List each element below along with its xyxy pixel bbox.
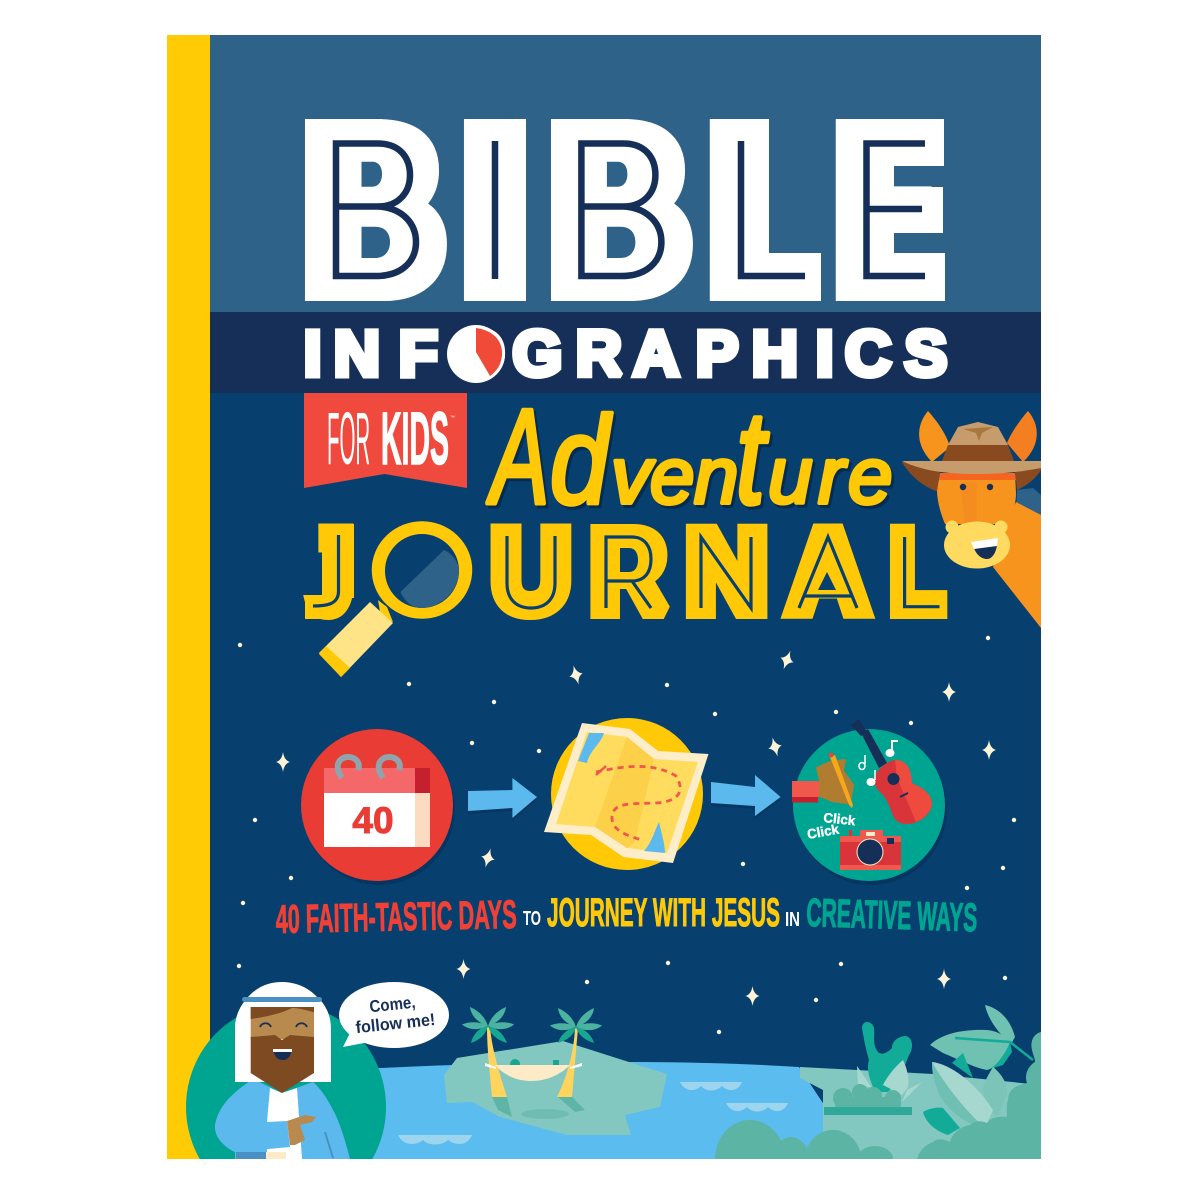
illustration: waves bbox=[398, 1082, 788, 1144]
illustration: right shore with plants bbox=[800, 1005, 1041, 1159]
title: BIBLE bbox=[304, 119, 945, 301]
icon: treasure map circle bbox=[544, 718, 708, 870]
title: BIBLE: I bbox=[456, 77, 533, 342]
heading: JOURNAL: O bbox=[385, 516, 455, 627]
tagline: TO bbox=[523, 908, 541, 930]
background: blue title band bbox=[210, 35, 1041, 312]
heading: Adventure script: e bbox=[652, 434, 697, 523]
tagline: JOURNEY WITH JESUS bbox=[547, 891, 780, 935]
title: BIBLE: B bbox=[548, 80, 692, 339]
title: BIBLE: L bbox=[705, 78, 814, 342]
heading: JOURNAL: A bbox=[789, 507, 867, 636]
illustration: sea bbox=[372, 1062, 823, 1159]
heading: JOURNAL: J bbox=[307, 508, 353, 636]
heading: Adventure script: d bbox=[550, 391, 613, 530]
hand bbox=[287, 1115, 316, 1145]
illustration: island with hammock bbox=[444, 1007, 667, 1135]
icon: magnifying glass bbox=[319, 528, 466, 677]
starfield bbox=[237, 636, 1016, 1034]
icon: calendar circle bbox=[301, 729, 455, 885]
title: BIBLE: E bbox=[831, 78, 939, 343]
book cover: KIDS bbox=[381, 397, 449, 480]
tagline: IN bbox=[785, 909, 800, 931]
heading: Adventure script: v bbox=[611, 431, 651, 520]
heading: Adventure script: u bbox=[770, 434, 815, 523]
shrub bbox=[824, 1084, 912, 1115]
heading: Adventure script: e bbox=[848, 431, 892, 520]
robe bbox=[215, 1079, 350, 1159]
heading: Adventure script: r bbox=[818, 431, 848, 520]
tagline: 40 FAITH-TASTIC DAYS bbox=[275, 893, 517, 942]
text: Click Click bbox=[808, 812, 856, 838]
face bbox=[251, 1007, 314, 1039]
heading: JOURNAL: U bbox=[492, 507, 570, 636]
heading: Adventure script: A bbox=[486, 382, 549, 533]
callout: Come, follow me bbox=[339, 982, 449, 1048]
tagline: CREATIVE WAYS bbox=[806, 891, 978, 940]
heading: Adventure script bbox=[485, 408, 894, 510]
small leaves bbox=[857, 1060, 922, 1102]
badge: For Kids banner: FOR bbox=[327, 398, 370, 481]
callout: Come, follow me: Come, bbox=[369, 993, 416, 1016]
large leaves bbox=[923, 1053, 1007, 1135]
arrow: calendar to map bbox=[468, 778, 537, 821]
title: INFOGRAPHICS: INFOGRAPHICS bbox=[304, 318, 947, 390]
tagline bbox=[276, 898, 977, 934]
icon: calendar circle: 40 bbox=[352, 800, 394, 841]
icon: creative activities circle bbox=[792, 719, 947, 885]
heading: JOURNAL: R bbox=[591, 508, 666, 636]
illustration: foreground bushes bbox=[715, 1032, 1041, 1159]
heading: Adventure script: u bbox=[768, 431, 812, 520]
icon: camera bbox=[840, 830, 901, 870]
badge: For Kids banner: ™ bbox=[450, 415, 455, 421]
title: BIBLE: B bbox=[302, 80, 446, 339]
heading: Adventure script: r bbox=[820, 434, 850, 523]
heading: Adventure script: v bbox=[614, 434, 654, 523]
icon: guitar bbox=[851, 719, 932, 824]
book cover bbox=[167, 35, 1041, 1200]
icon: pie chart letter O bbox=[447, 325, 505, 383]
text: Click Click: Click bbox=[806, 822, 841, 842]
heading: Adventure script: e bbox=[850, 434, 895, 523]
cactus bbox=[862, 1022, 912, 1092]
background: dark infographics band bbox=[210, 312, 1041, 393]
icon: hand with pencil bbox=[792, 752, 853, 808]
heading: Adventure script: A bbox=[489, 385, 552, 536]
heading: Adventure script: e bbox=[650, 431, 694, 520]
background: navy main panel bbox=[210, 393, 1041, 1159]
heading: Adventure script: n bbox=[696, 434, 741, 523]
callout: Come, follow me: follow me! bbox=[355, 1010, 436, 1037]
heading: Adventure script: t bbox=[736, 384, 769, 532]
heading: Adventure script: t bbox=[738, 387, 772, 535]
text: Click Click: Click bbox=[823, 810, 857, 828]
badge: For Kids banner bbox=[304, 393, 467, 488]
illustration: Jesus character bbox=[186, 982, 386, 1159]
heading: JOURNAL: N bbox=[686, 508, 767, 636]
spine: yellow strip bbox=[167, 35, 210, 1159]
icon: music notes bbox=[859, 741, 898, 786]
heading: Adventure script: d bbox=[552, 394, 615, 533]
heading: Adventure script: n bbox=[694, 431, 738, 520]
illustration: horse with hat bbox=[902, 411, 1041, 628]
arrow: map to creative circle bbox=[711, 775, 781, 819]
palm leaf bbox=[930, 1005, 1033, 1070]
heading: JOURNAL: L bbox=[890, 508, 944, 636]
heading: JOURNAL bbox=[303, 524, 948, 620]
head wrap bbox=[235, 982, 331, 1082]
